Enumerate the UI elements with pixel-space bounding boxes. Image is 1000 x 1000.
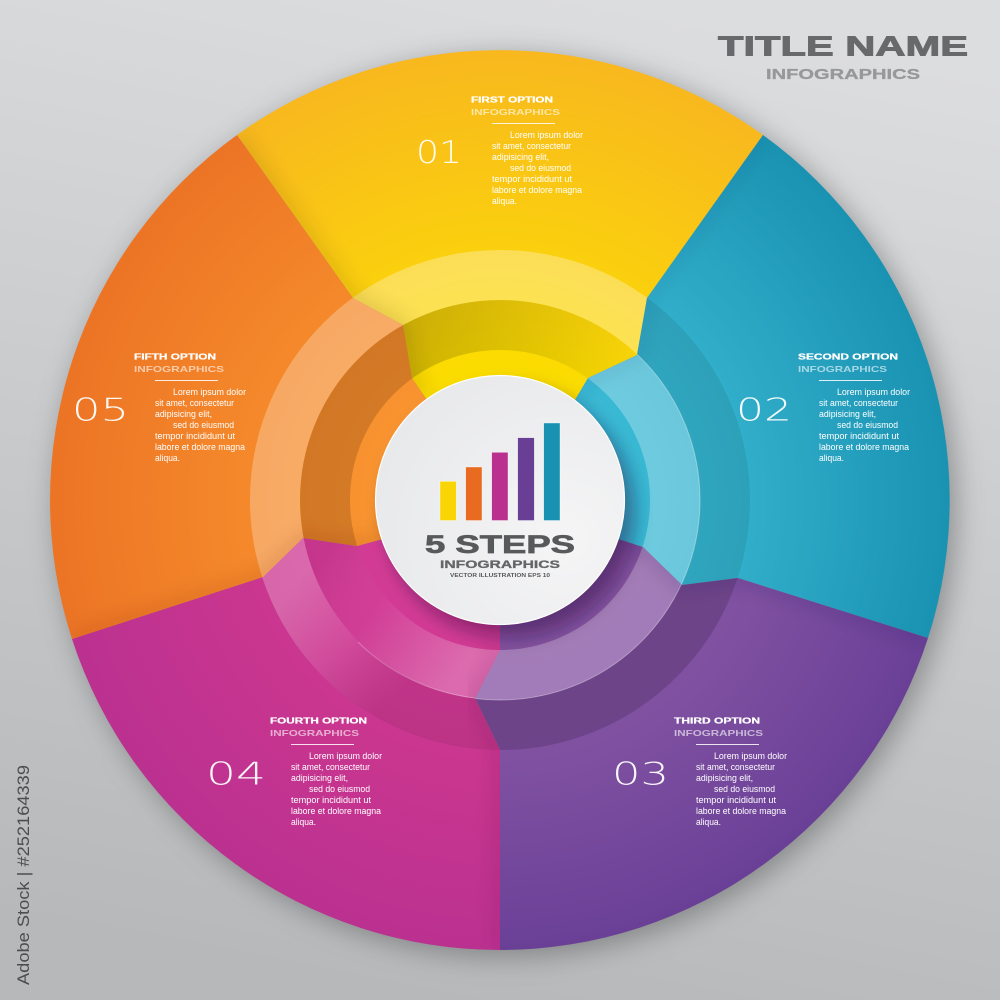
center circle shadow: [385, 387, 635, 637]
body text: adipisicing elit,: [155, 409, 212, 419]
panel: fifth segment orange: [50, 135, 426, 639]
body text: Lorem ipsum dolor: [714, 751, 787, 761]
body text: labore et dolore magna: [492, 185, 582, 195]
center heading: 5 STEPS: [425, 531, 575, 559]
body text: Lorem ipsum dolor: [510, 130, 583, 140]
heading: FOURTH OPTION: [270, 717, 368, 726]
body text: sed do eiusmod: [510, 163, 571, 173]
body text: adipisicing elit,: [819, 409, 876, 419]
body text: sit amet, consectetur: [155, 398, 234, 408]
side credit text: Adobe Stock | #252164339: [14, 765, 33, 985]
subheading: INFOGRAPHICS: [134, 365, 225, 374]
body text: aliqua.: [291, 817, 316, 827]
option 01: [416, 96, 583, 206]
body text: sit amet, consectetur: [492, 141, 571, 151]
body text: Lorem ipsum dolor: [837, 387, 910, 397]
body text: aliqua.: [492, 196, 517, 206]
number 05: 05: [72, 392, 129, 428]
option 05: [72, 353, 246, 463]
number 01: 01: [416, 135, 462, 171]
body text: adipisicing elit,: [696, 773, 753, 783]
subheading: INFOGRAPHICS: [674, 729, 764, 738]
body text: sit amet, consectetur: [291, 762, 370, 772]
panel: first segment yellow: [237, 50, 763, 400]
body text: sed do eiusmod: [714, 784, 775, 794]
heading: SECOND OPTION: [798, 353, 899, 362]
body text: aliqua.: [819, 453, 844, 463]
panel: third segment purple: [475, 539, 928, 950]
option 04: [206, 717, 382, 827]
center subheading: INFOGRAPHICS: [440, 559, 560, 571]
body text: sed do eiusmod: [309, 784, 370, 794]
body text: tempor incididunt ut: [291, 795, 372, 805]
body text: [155, 387, 246, 463]
body text: labore et dolore magna: [155, 442, 245, 452]
icon: bar chart: [440, 423, 560, 520]
body text: sed do eiusmod: [837, 420, 898, 430]
body text: sed do eiusmod: [173, 420, 234, 430]
body text: [819, 387, 910, 463]
body text: tempor incididunt ut: [155, 431, 236, 441]
body text: aliqua.: [155, 453, 180, 463]
body text: [696, 751, 787, 827]
subheading: INFOGRAPHICS: [270, 729, 360, 738]
body text: adipisicing elit,: [492, 152, 549, 162]
body text: tempor incididunt ut: [819, 431, 900, 441]
body text: [492, 130, 583, 206]
panel: second segment blue: [575, 135, 950, 638]
body text: labore et dolore magna: [819, 442, 909, 452]
subheading: INFOGRAPHICS: [471, 108, 561, 117]
number 03: 03: [612, 756, 669, 792]
option 03: [612, 717, 787, 827]
heading: THIRD OPTION: [674, 717, 761, 726]
heading: FIFTH OPTION: [134, 353, 217, 362]
body text: labore et dolore magna: [291, 806, 381, 816]
body text: Lorem ipsum dolor: [309, 751, 382, 761]
center caption: VECTOR ILLUSTRATION EPS 10: [450, 573, 550, 579]
panel: fourth segment magenta: [72, 538, 500, 950]
subheading: INFOGRAPHICS: [798, 365, 888, 374]
body text: tempor incididunt ut: [696, 795, 777, 805]
body text: labore et dolore magna: [696, 806, 786, 816]
subtitle: INFOGRAPHICS: [766, 66, 920, 83]
body text: tempor incididunt ut: [492, 174, 573, 184]
body text: adipisicing elit,: [291, 773, 348, 783]
number 02: 02: [736, 392, 792, 428]
body text: sit amet, consectetur: [819, 398, 898, 408]
body text: sit amet, consectetur: [696, 762, 775, 772]
center circle: [376, 376, 624, 624]
number 04: 04: [206, 756, 266, 792]
body text: [291, 751, 382, 827]
option 02: [736, 353, 910, 463]
title: TITLE NAME: [718, 30, 968, 62]
heading: FIRST OPTION: [471, 96, 554, 105]
body text: Lorem ipsum dolor: [173, 387, 246, 397]
body text: aliqua.: [696, 817, 721, 827]
